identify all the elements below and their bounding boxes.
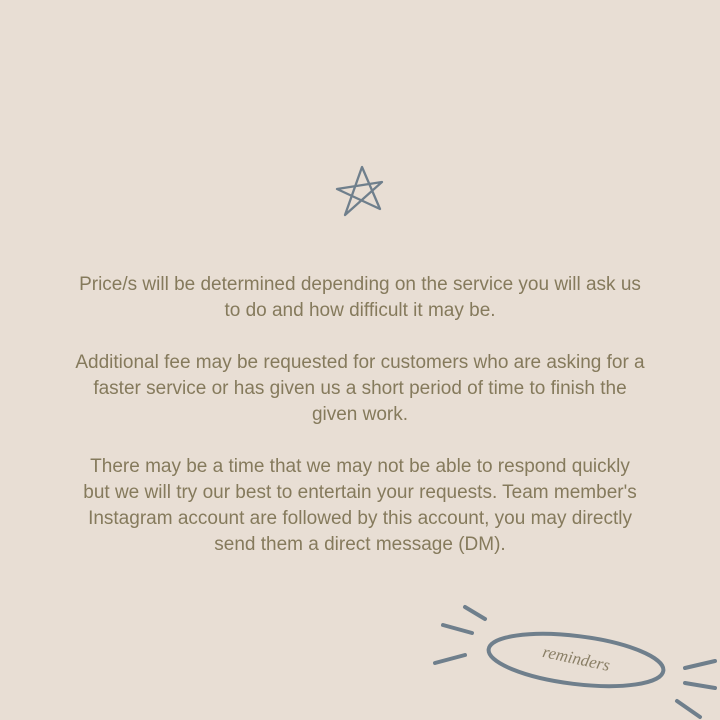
text block: pricing: Price/s will be determined depending on the service you will ask us bbox=[79, 274, 641, 295]
text block: response bbox=[83, 456, 637, 555]
text block: response: send them a direct message (DM). bbox=[214, 534, 506, 555]
text block: response: Instagram account are followed by this account, you may directly bbox=[88, 508, 632, 529]
badge: reminders bbox=[433, 604, 717, 720]
text block: response: but we will try our best to entertain your requests. Team member's bbox=[83, 482, 637, 503]
icon: star bbox=[336, 166, 384, 216]
text block: additional fee: given work. bbox=[312, 404, 408, 425]
text block: pricing: to do and how difficult it may be. bbox=[224, 300, 496, 321]
text block: additional fee: Additional fee may be requested for customers who are asking for a bbox=[75, 352, 645, 373]
text block: additional fee bbox=[75, 352, 645, 425]
text block: additional fee: faster service or has given us a short period of time to finish the bbox=[93, 378, 627, 399]
text block: pricing bbox=[79, 274, 641, 321]
text block: response: There may be a time that we may not be able to respond quickly bbox=[90, 456, 630, 477]
badge: reminders: reminders bbox=[541, 642, 612, 675]
